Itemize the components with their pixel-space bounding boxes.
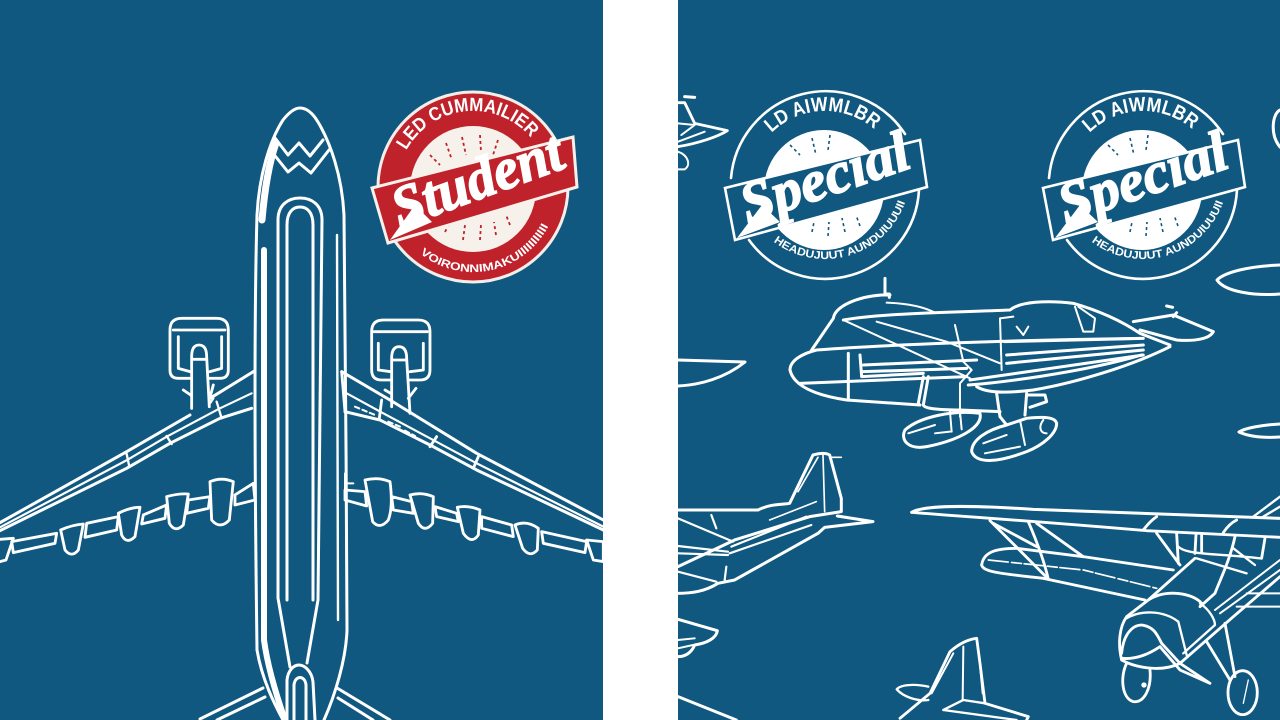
strut segments and flap pods left <box>12 483 255 553</box>
illustration: right edge wing tips <box>1217 110 1280 437</box>
badge arc text top: LED CUMMAILIER <box>396 98 538 150</box>
illustration: upper left edge plane fragment <box>678 97 727 169</box>
stamp dashes <box>1108 135 1178 236</box>
stamp title swash <box>737 205 780 238</box>
stamp arc text top: LD AIWMLBR <box>1081 96 1198 132</box>
badge: white Special stamp two <box>1042 90 1246 280</box>
badge inner circle <box>410 126 536 252</box>
illustration: centre seaplane <box>790 278 1213 460</box>
badge: white Special stamp one <box>724 90 928 280</box>
badge disc <box>378 92 568 282</box>
wing engine pod right <box>372 320 430 380</box>
badge script title: Student <box>382 118 573 240</box>
illustration: lower left plane fragment <box>678 619 736 720</box>
badge arc text bottom: VOIRONNIMAKUIIIIIIIIIII <box>422 223 548 272</box>
illustration: biplane <box>912 497 1280 715</box>
right wing and engines <box>342 320 603 562</box>
left wing and engines <box>0 318 255 562</box>
stamp script title: Special <box>731 118 919 236</box>
stamp arc text bottom: HEADUJUUT AUNDUIUUUII <box>774 200 905 260</box>
illustration: left tail section plane <box>678 453 873 593</box>
illustration: left edge wing tip <box>678 360 745 386</box>
badge title swash <box>390 210 432 240</box>
badge dashes <box>430 135 510 240</box>
stamp banner <box>725 140 927 240</box>
panel: right blueprint background <box>678 0 1280 720</box>
badge banner <box>372 137 577 243</box>
panel: left blueprint background <box>0 0 603 720</box>
stamp arc text top: LD AIWMLBR <box>763 96 880 132</box>
illustration: top view airliner <box>0 108 603 720</box>
stamp title swash <box>1055 205 1098 238</box>
stamp ring <box>731 91 919 279</box>
stamp script title: Special <box>1049 118 1237 236</box>
stamp inner circle <box>1082 130 1202 250</box>
badge: red Student stamp <box>370 90 579 284</box>
illustration: lower centre tail fin <box>897 638 1028 720</box>
stamp inner circle <box>764 130 884 250</box>
strut segments and flap pods right <box>345 490 587 553</box>
stamp arc text bottom: HEADUJUUT AUNDUIUUUII <box>1092 200 1223 260</box>
wing engine pod left <box>170 318 228 378</box>
stamp dashes <box>790 135 860 236</box>
stamp banner <box>1043 140 1245 240</box>
stamp ring <box>1049 91 1237 279</box>
fuselage <box>200 108 390 720</box>
